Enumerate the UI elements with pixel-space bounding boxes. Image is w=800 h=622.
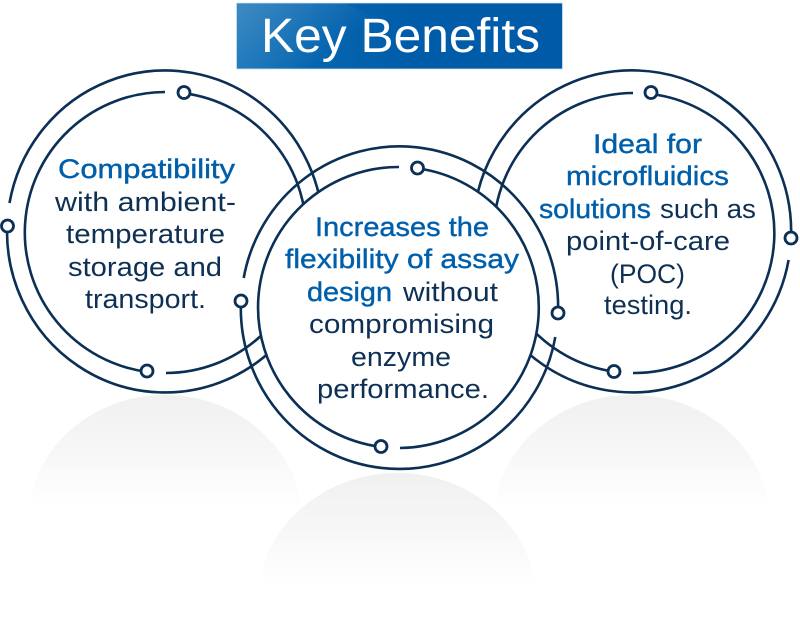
text: compatibility: transport. <box>85 284 206 314</box>
text: flexibility of assay design: design <box>307 277 392 307</box>
title: Key Benefits <box>261 10 540 63</box>
text: flexibility of assay design: enzyme <box>351 342 451 372</box>
text: compatibility: with ambient- <box>54 187 236 217</box>
text: compatibility: temperature <box>66 219 225 249</box>
text: microfluidics solutions: microfluidics <box>566 161 729 191</box>
left circle rings <box>2 70 323 392</box>
text: flexibility of assay design: performance. <box>317 374 489 404</box>
reflection: left circle <box>30 395 301 508</box>
text: flexibility of assay design: compromising <box>309 309 494 339</box>
text: microfluidics solutions <box>539 129 756 320</box>
centre circle rings <box>235 146 564 469</box>
text: flexibility of assay design <box>285 212 520 404</box>
text: microfluidics solutions: solutions <box>539 194 651 224</box>
text: microfluidics solutions: (POC) <box>610 259 685 289</box>
text: microfluidics solutions: Ideal for <box>593 129 702 159</box>
text: flexibility of assay design: flexibility of assay <box>285 244 520 274</box>
title banner <box>236 3 562 69</box>
text: compatibility: storage and <box>68 252 222 282</box>
reflection: right circle <box>495 395 768 508</box>
right circle rings <box>473 70 797 392</box>
text: compatibility <box>54 154 236 314</box>
reflection: centre circle <box>260 473 535 586</box>
text: flexibility of assay design: without <box>402 277 499 307</box>
text: microfluidics solutions: such as <box>660 194 756 224</box>
text: microfluidics solutions: testing. <box>604 290 692 320</box>
text: flexibility of assay design: Increases the <box>315 212 489 242</box>
text: microfluidics solutions: point-of-care <box>566 226 730 256</box>
text: compatibility: Compatibility <box>58 154 236 184</box>
